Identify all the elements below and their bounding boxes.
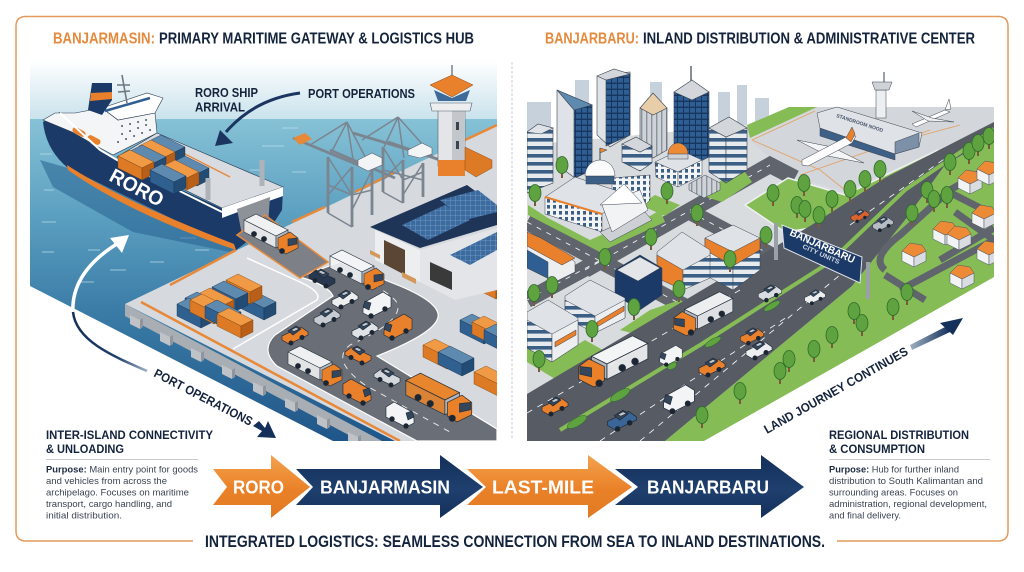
deck	[117, 133, 283, 208]
highway shrubs	[565, 299, 781, 431]
text block: regional distribution: Purpose: Hub for further inland	[829, 464, 959, 474]
crane trolleys	[358, 153, 382, 171]
flow arrow: Last-mile	[467, 455, 632, 518]
highway	[527, 122, 994, 441]
tower: blue slab	[597, 72, 630, 147]
apron markings	[752, 111, 960, 190]
lawn beside airport	[745, 150, 938, 232]
tower: striped navy	[709, 128, 726, 183]
control tower	[430, 65, 473, 176]
window dots	[118, 120, 150, 142]
crane boom tip	[293, 133, 312, 145]
houses	[902, 161, 1001, 289]
text block: regional distribution: & CONSUMPTION	[829, 442, 925, 456]
cranes	[293, 117, 440, 227]
vehicles	[282, 250, 472, 428]
road with traffic lanes	[268, 262, 497, 441]
Banjarbaru city sign	[782, 225, 862, 283]
towers	[527, 66, 747, 193]
container by tower	[465, 147, 492, 177]
tower: dark with antenna	[690, 66, 692, 84]
city ground	[527, 107, 994, 441]
mid-rise block group	[615, 225, 760, 310]
truck on ramp	[244, 214, 298, 254]
text block: inter-island connectivity: initial distribution.	[46, 510, 122, 520]
hull	[43, 112, 283, 250]
green city lots	[527, 172, 778, 382]
flow arrow: Banjarmasin: BANJARMASIN	[320, 476, 450, 498]
label: RoRo ship arrival: ARRIVAL	[195, 100, 245, 114]
ship	[43, 75, 283, 250]
text block: inter-island connectivity: INTER-ISLAND CONNECTIVITY	[46, 428, 213, 442]
low block	[622, 144, 652, 171]
lifeboats	[72, 128, 86, 137]
warehouse with solar roof	[370, 185, 497, 300]
terminal	[817, 107, 922, 160]
flow arrow: Last-mile: LAST-MILE	[492, 476, 594, 498]
highway traffic	[542, 209, 893, 431]
plane: departing	[912, 99, 954, 127]
text block: regional distribution: surrounding areas. Focuses on	[829, 486, 958, 498]
bow door opening	[237, 197, 270, 231]
heading: Banjarbaru: BANJARBARU:	[545, 30, 639, 48]
flow arrow: RoRo: RORO	[233, 476, 284, 498]
city roads	[527, 165, 795, 325]
ship containers	[149, 134, 186, 160]
sea	[30, 119, 497, 444]
arrow: RoRo ship arrival	[215, 93, 300, 146]
curve continuing to port operations	[73, 312, 147, 371]
terminal: STANDROOM NOOD	[835, 113, 884, 134]
label: RoRo ship arrival: RORO SHIP	[195, 86, 258, 100]
tower: domed beige	[640, 108, 667, 158]
text block: regional distribution: and final delivery.	[829, 510, 901, 520]
road lane dashes	[527, 165, 790, 325]
residential roads	[880, 165, 994, 300]
label: port operations top: PORT OPERATIONS	[308, 87, 415, 101]
loading ramp	[237, 215, 328, 278]
text block: regional distribution: distribution to South Kalimantan and	[829, 475, 983, 486]
plane: main with orange tail	[797, 127, 864, 166]
right side lawn	[665, 136, 994, 441]
Banjarbaru city sign: BANJARBARU	[788, 227, 857, 266]
text block: inter-island connectivity: and vehicles from across the	[46, 475, 167, 486]
funnel	[88, 83, 112, 115]
text block: inter-island connectivity: Purpose: Main entry point for goods	[46, 464, 198, 474]
deck posts	[208, 160, 262, 200]
airport lawn	[747, 107, 817, 138]
pale skyline	[527, 80, 769, 132]
low offices south	[527, 280, 625, 362]
RORO hull lettering: RORO	[106, 165, 167, 212]
text block: inter-island connectivity	[46, 428, 213, 520]
airport control tower	[872, 72, 892, 118]
port quay	[125, 125, 497, 446]
flow arrow: RoRo	[213, 455, 310, 518]
text block: regional distribution: administration, regional development,	[829, 498, 987, 509]
sky	[30, 69, 497, 119]
airport apron	[749, 107, 994, 192]
right container stacks	[422, 290, 497, 396]
dashed panel divider	[511, 62, 513, 440]
warehouse city west	[527, 232, 575, 282]
arrow: white sea curve	[73, 235, 129, 314]
flow arrow: Banjarbaru: BANJARBARU	[647, 476, 769, 498]
sign posts	[776, 223, 868, 299]
hull orange stripe	[67, 165, 236, 250]
ship shadow	[40, 160, 240, 252]
bottom caption: INTEGRATED LOGISTICS: SEAMLESS CONNECTION FROM SEA TO INLAND DESTINATIONS.	[205, 533, 825, 551]
text block: regional distribution: REGIONAL DISTRIBUTION	[829, 428, 969, 442]
label: land journey continues: LAND JOURNEY CONTINUES	[762, 344, 910, 437]
text block: inter-island connectivity: transport, cargo handling, and	[46, 498, 172, 509]
Banjarbaru city sign: CITY UNITS	[801, 243, 841, 266]
label: port operations diagonal: PORT OPERATIONS	[152, 366, 255, 429]
bridge	[102, 93, 163, 120]
mast	[117, 75, 130, 103]
tower: wedge glass	[557, 90, 592, 178]
superstructure	[43, 108, 157, 155]
domed civic building	[655, 143, 720, 198]
panel: Banjarmasin port illustration	[30, 60, 520, 446]
heading: Banjarmasin: BANJARMASIN:	[53, 30, 155, 48]
water streaks	[40, 128, 306, 282]
trees	[528, 128, 995, 428]
arrow: port operations small	[253, 421, 276, 438]
tower: white striped west	[527, 128, 553, 193]
text block: inter-island connectivity: & UNLOADING	[46, 442, 124, 456]
heading: Banjarmasin: PRIMARY MARITIME GATEWAY & LOGISTICS HUB	[159, 30, 474, 48]
text block: inter-island connectivity: archipelago. Focuses on maritime	[46, 486, 189, 498]
arrow: land journey	[910, 318, 963, 350]
flow arrow: Banjarmasin	[296, 455, 483, 518]
container stack	[177, 274, 276, 338]
panel: Banjarbaru city illustration	[527, 66, 1001, 441]
text block: regional distribution	[829, 428, 990, 520]
capitol building	[545, 148, 652, 242]
flow arrow: Banjarbaru	[615, 455, 804, 518]
